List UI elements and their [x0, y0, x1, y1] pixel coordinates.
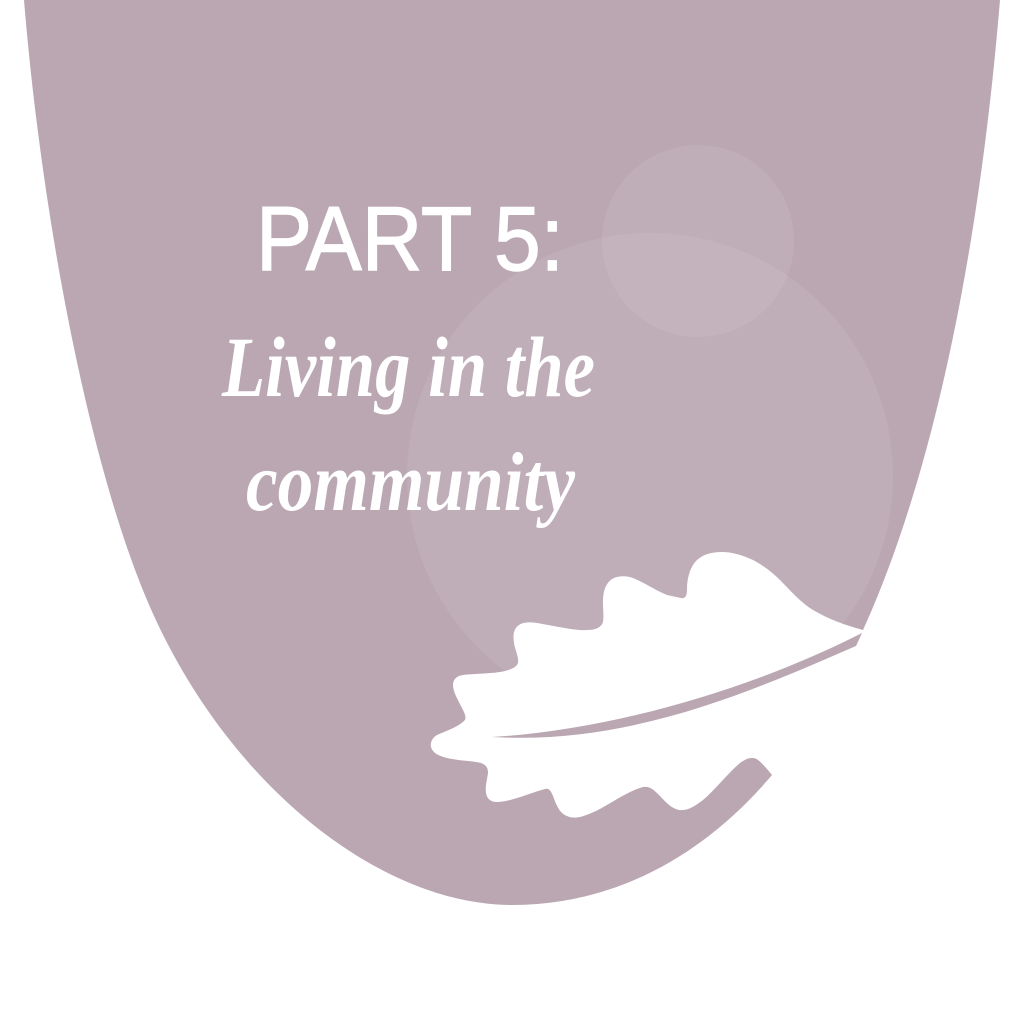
leaf vein — [492, 633, 862, 738]
icon: white oak leaf — [431, 552, 905, 818]
decorative circles — [602, 233, 788, 337]
heading: title script: Living in the — [221, 319, 595, 415]
heading: title script: community — [246, 436, 576, 529]
heading: part number: PART 5: — [256, 189, 564, 290]
heading: title script — [221, 319, 595, 529]
